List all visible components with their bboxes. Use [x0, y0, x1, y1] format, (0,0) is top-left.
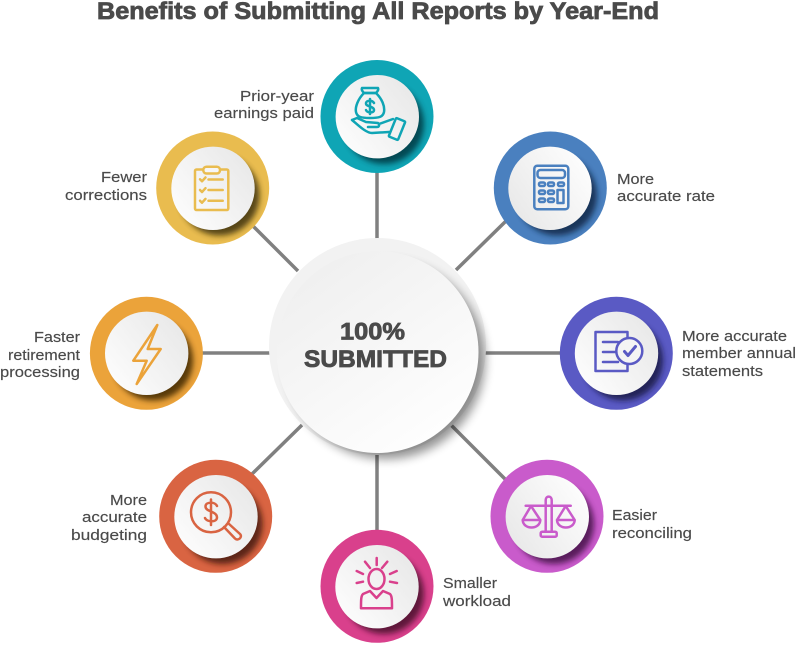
label: more accurate member annual statements: statements [682, 364, 763, 380]
label: more accurate rate: More [617, 172, 654, 188]
node: easier reconciling [490, 460, 604, 573]
label: easier reconciling: reconciling [612, 526, 692, 542]
label: more accurate budgeting [71, 493, 147, 544]
label: faster retirement processing [0, 330, 80, 381]
icon: money bag in hand [352, 88, 405, 140]
label: fewer corrections: Fewer [101, 170, 147, 186]
label: more accurate budgeting: More [110, 493, 147, 509]
node: smaller workload [320, 530, 434, 643]
icon: calculator [534, 166, 568, 209]
label: prior-year earnings paid [214, 89, 314, 122]
centre circle: 100% submitted: 100% [340, 318, 405, 346]
label: fewer corrections [65, 170, 147, 204]
label: faster retirement processing: processing [0, 365, 80, 381]
label: more accurate budgeting: accurate [82, 510, 147, 526]
label: fewer corrections: corrections [65, 188, 147, 204]
node: more accurate rate [494, 132, 607, 244]
centre circle: 100% submitted: SUBMITTED [304, 346, 447, 373]
label: more accurate member annual statements: member annual [682, 346, 796, 362]
label: smaller workload: Smaller [443, 576, 497, 592]
icon: balance scale [523, 497, 575, 537]
icon: person with rays [357, 558, 397, 608]
node: fewer corrections [156, 132, 269, 244]
icon: clipboard checklist [195, 167, 228, 210]
icon: document with check [596, 332, 642, 371]
node: more accurate budgeting [159, 460, 272, 573]
label: faster retirement processing: retirement [8, 348, 80, 364]
node: prior-year earnings paid [320, 60, 434, 173]
label: more accurate rate [617, 172, 715, 205]
icon: magnifier with dollar [191, 492, 241, 539]
label: prior-year earnings paid: earnings paid [214, 106, 314, 122]
label: prior-year earnings paid: Prior-year [240, 89, 314, 105]
node: more accurate member annual statements [560, 297, 673, 410]
label: more accurate rate: accurate rate [617, 189, 715, 205]
label: faster retirement processing: Faster [34, 330, 80, 346]
label: smaller workload [442, 576, 511, 610]
icon: lightning bolt [133, 325, 161, 384]
node: faster retirement processing [90, 297, 203, 410]
label: more accurate member annual statements: More accurate [682, 329, 787, 345]
connector lines [200, 170, 562, 532]
label: smaller workload: workload [442, 594, 511, 610]
label: more accurate member annual statements [682, 329, 796, 380]
label: easier reconciling: Easier [612, 508, 657, 524]
centre circle: 100% submitted [269, 238, 486, 459]
label: more accurate budgeting: budgeting [71, 528, 147, 544]
label: easier reconciling [612, 508, 692, 542]
